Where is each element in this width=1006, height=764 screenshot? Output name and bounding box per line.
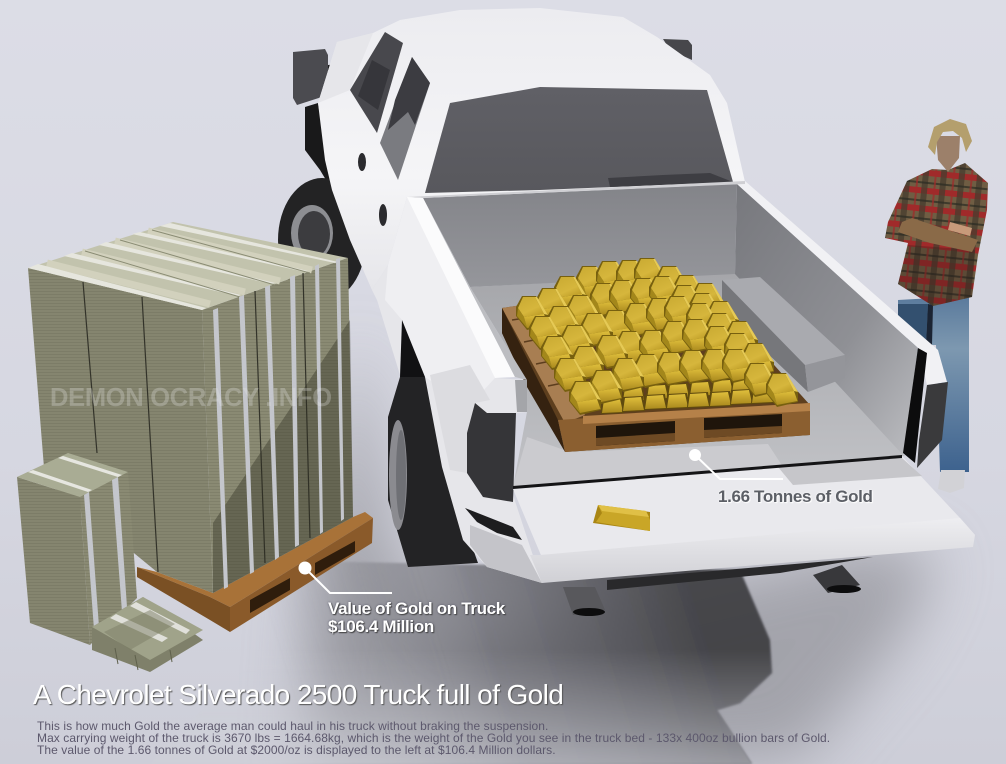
front wall	[423, 184, 737, 287]
truck cab	[318, 8, 745, 290]
top face	[28, 222, 348, 310]
tailgate shadow patch	[778, 458, 922, 485]
truck bed	[407, 181, 948, 487]
big money pallet	[137, 512, 373, 632]
man	[885, 119, 988, 493]
label: tonnes of gold: 1.66 Tonnes of Gold	[718, 487, 873, 506]
left face	[28, 268, 213, 593]
bed floor	[470, 273, 905, 487]
right tail light	[917, 382, 948, 468]
small money bundles	[92, 597, 203, 672]
gold bars stack	[516, 258, 798, 415]
label: value of gold	[328, 599, 506, 636]
big money stack	[28, 222, 353, 593]
rear window	[425, 87, 733, 193]
label: value of gold: Value of Gold on Truck	[328, 599, 505, 618]
exhaust pipes	[563, 557, 873, 616]
loose gold bar	[593, 505, 650, 531]
callout: value line	[298, 562, 392, 593]
right face	[202, 258, 353, 593]
right mirror	[663, 39, 692, 60]
door handles	[358, 153, 366, 171]
description text: Max carrying weight of the truck is 3670 lbs = 1664.68kg, which is the weight of the Gold you see in the truck bed - 133x 400oz bullion bars of Gold.	[37, 731, 830, 745]
right wall	[735, 184, 918, 455]
callout: tonnes line	[689, 449, 783, 479]
description text: This is how much Gold the average man could haul in his truck without braking the suspension.	[37, 719, 548, 733]
right rim	[737, 181, 947, 385]
gold pallet	[502, 297, 810, 452]
truck body side	[372, 197, 542, 583]
description text	[37, 719, 830, 757]
pallet front face	[558, 403, 810, 452]
shoe	[938, 470, 965, 493]
label: value of gold: $106.4 Million	[328, 617, 434, 636]
title: A Chevrolet Silverado 2500 Truck full of Gold	[33, 679, 563, 710]
description text: The value of the 1.66 tonnes of Gold at $2000/oz is displayed to the left at $106.4 Million dollars.	[37, 743, 556, 757]
left mirror	[293, 49, 363, 105]
left tail light	[467, 403, 516, 502]
rear wheel	[388, 377, 478, 567]
jeans	[898, 296, 969, 472]
head	[936, 136, 960, 172]
paper straps	[213, 258, 344, 589]
tailgate	[513, 455, 975, 583]
front wheel	[278, 103, 366, 302]
face shadow	[213, 320, 353, 593]
floor shadow of truck	[150, 330, 940, 764]
shirt	[885, 163, 988, 306]
tailgate front edge	[530, 518, 975, 583]
wheel well box	[722, 277, 845, 365]
rim highlight	[407, 197, 515, 378]
watermark: DEMON OCRACY .INFO	[50, 384, 332, 412]
rear rim	[407, 181, 745, 198]
side windows	[350, 32, 403, 133]
small money stack	[17, 453, 137, 645]
dark gaps	[83, 282, 158, 572]
floor light patch	[513, 437, 785, 486]
